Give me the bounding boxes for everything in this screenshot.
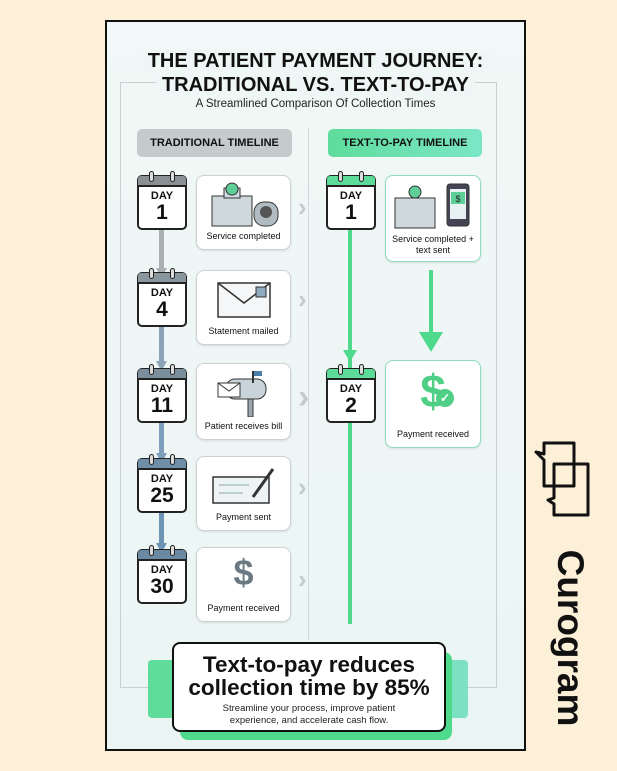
- calendar day 2: DAY: [340, 383, 362, 395]
- callout: 85%: Text-to-pay reduces: [203, 652, 415, 677]
- brand: Curogram: Curogram: [550, 550, 591, 726]
- text-to-pay day 1: [326, 171, 482, 264]
- calendar day 2: 2: [345, 394, 357, 417]
- chevrons: ›: [298, 472, 307, 502]
- card: service completed + text sent: text sent: [416, 245, 450, 255]
- callout: 85%: collection time by 85%: [188, 675, 430, 700]
- row 2 traditional: [137, 268, 292, 346]
- calendar day 1: [137, 175, 187, 230]
- divider: [308, 128, 309, 640]
- title: [148, 50, 483, 96]
- card: payment received: [196, 547, 291, 622]
- card: service completed + text sent: $: [455, 194, 461, 204]
- calendar day 11: 11: [151, 394, 173, 417]
- card: statement mailed: Statement mailed: [208, 326, 279, 336]
- green timeline line: [348, 228, 352, 624]
- card: service completed + text sent: [385, 175, 481, 262]
- row 4 traditional: [137, 454, 292, 532]
- calendar day 1: DAY: [151, 190, 173, 202]
- chevrons: ›: [298, 378, 309, 416]
- chevrons: [298, 192, 309, 594]
- card: payment received: Payment received: [397, 429, 469, 439]
- card: statement mailed: [196, 270, 291, 345]
- chevrons: ›: [298, 192, 307, 222]
- title: THE PATIENT PAYMENT JOURNEY:: [148, 50, 483, 72]
- calendar day 1 green: 1: [345, 201, 357, 224]
- traditional connector arrows: [156, 230, 167, 549]
- header: traditional: TRADITIONAL TIMELINE: [150, 137, 279, 149]
- chevrons: ›: [298, 284, 307, 314]
- card: service completed: Service completed: [206, 231, 281, 241]
- card: payment sent: [196, 456, 291, 531]
- arrow to day 2: [343, 350, 357, 358]
- calendar day 30: [137, 549, 187, 604]
- callout: 85%: Streamline your process, improve patient: [223, 703, 395, 714]
- calendar day 1 green: [326, 175, 376, 230]
- header: text-to-pay: TEXT-TO-PAY TIMELINE: [343, 137, 467, 149]
- card: payment received: $: [420, 365, 446, 417]
- callout: 85%: experience, and accelerate cash flow.: [230, 715, 388, 726]
- card: payment sent: Payment sent: [216, 512, 271, 522]
- callout: 85%: [148, 642, 468, 740]
- card: payment received: ✓: [440, 391, 450, 405]
- calendar day 4: [137, 272, 187, 327]
- calendar day 4: DAY: [151, 287, 173, 299]
- header: text-to-pay: [328, 129, 482, 157]
- calendar day 2: [326, 368, 376, 423]
- main panel: [105, 20, 526, 751]
- row 1 traditional: [137, 171, 292, 252]
- card: patient receives bill: Patient receives bill: [205, 421, 282, 431]
- subtitle: A Streamlined Comparison Of Collection Times: [196, 98, 435, 110]
- card: patient receives bill: [196, 363, 291, 440]
- calendar day 4: 4: [156, 298, 168, 321]
- big down arrow: [419, 270, 443, 352]
- card: payment received: [385, 360, 481, 448]
- text-to-pay day 2: [326, 360, 482, 450]
- row 3 traditional: [137, 363, 292, 442]
- calendar day 11: [137, 368, 187, 423]
- logo icon: [534, 442, 590, 516]
- row 5 traditional: [137, 545, 292, 624]
- calendar day 11: DAY: [151, 383, 173, 395]
- calendar day 25: DAY: [151, 473, 173, 485]
- calendar day 1: 1: [156, 201, 168, 224]
- calendar day 25: [137, 458, 187, 513]
- card: payment received: Payment received: [207, 603, 280, 613]
- card: service completed + text sent: Service completed +: [392, 234, 474, 244]
- calendar day 25: 25: [150, 484, 174, 507]
- chevrons: ›: [298, 564, 307, 594]
- calendar day 30: 30: [150, 575, 174, 598]
- card: service completed: [196, 175, 291, 250]
- header: traditional: [137, 129, 292, 157]
- title: TRADITIONAL VS. TEXT-TO-PAY: [162, 74, 469, 96]
- card: payment received: $: [233, 552, 254, 593]
- calendar day 1 green: DAY: [340, 190, 362, 202]
- inner frame: [120, 82, 497, 688]
- calendar day 30: DAY: [151, 564, 173, 576]
